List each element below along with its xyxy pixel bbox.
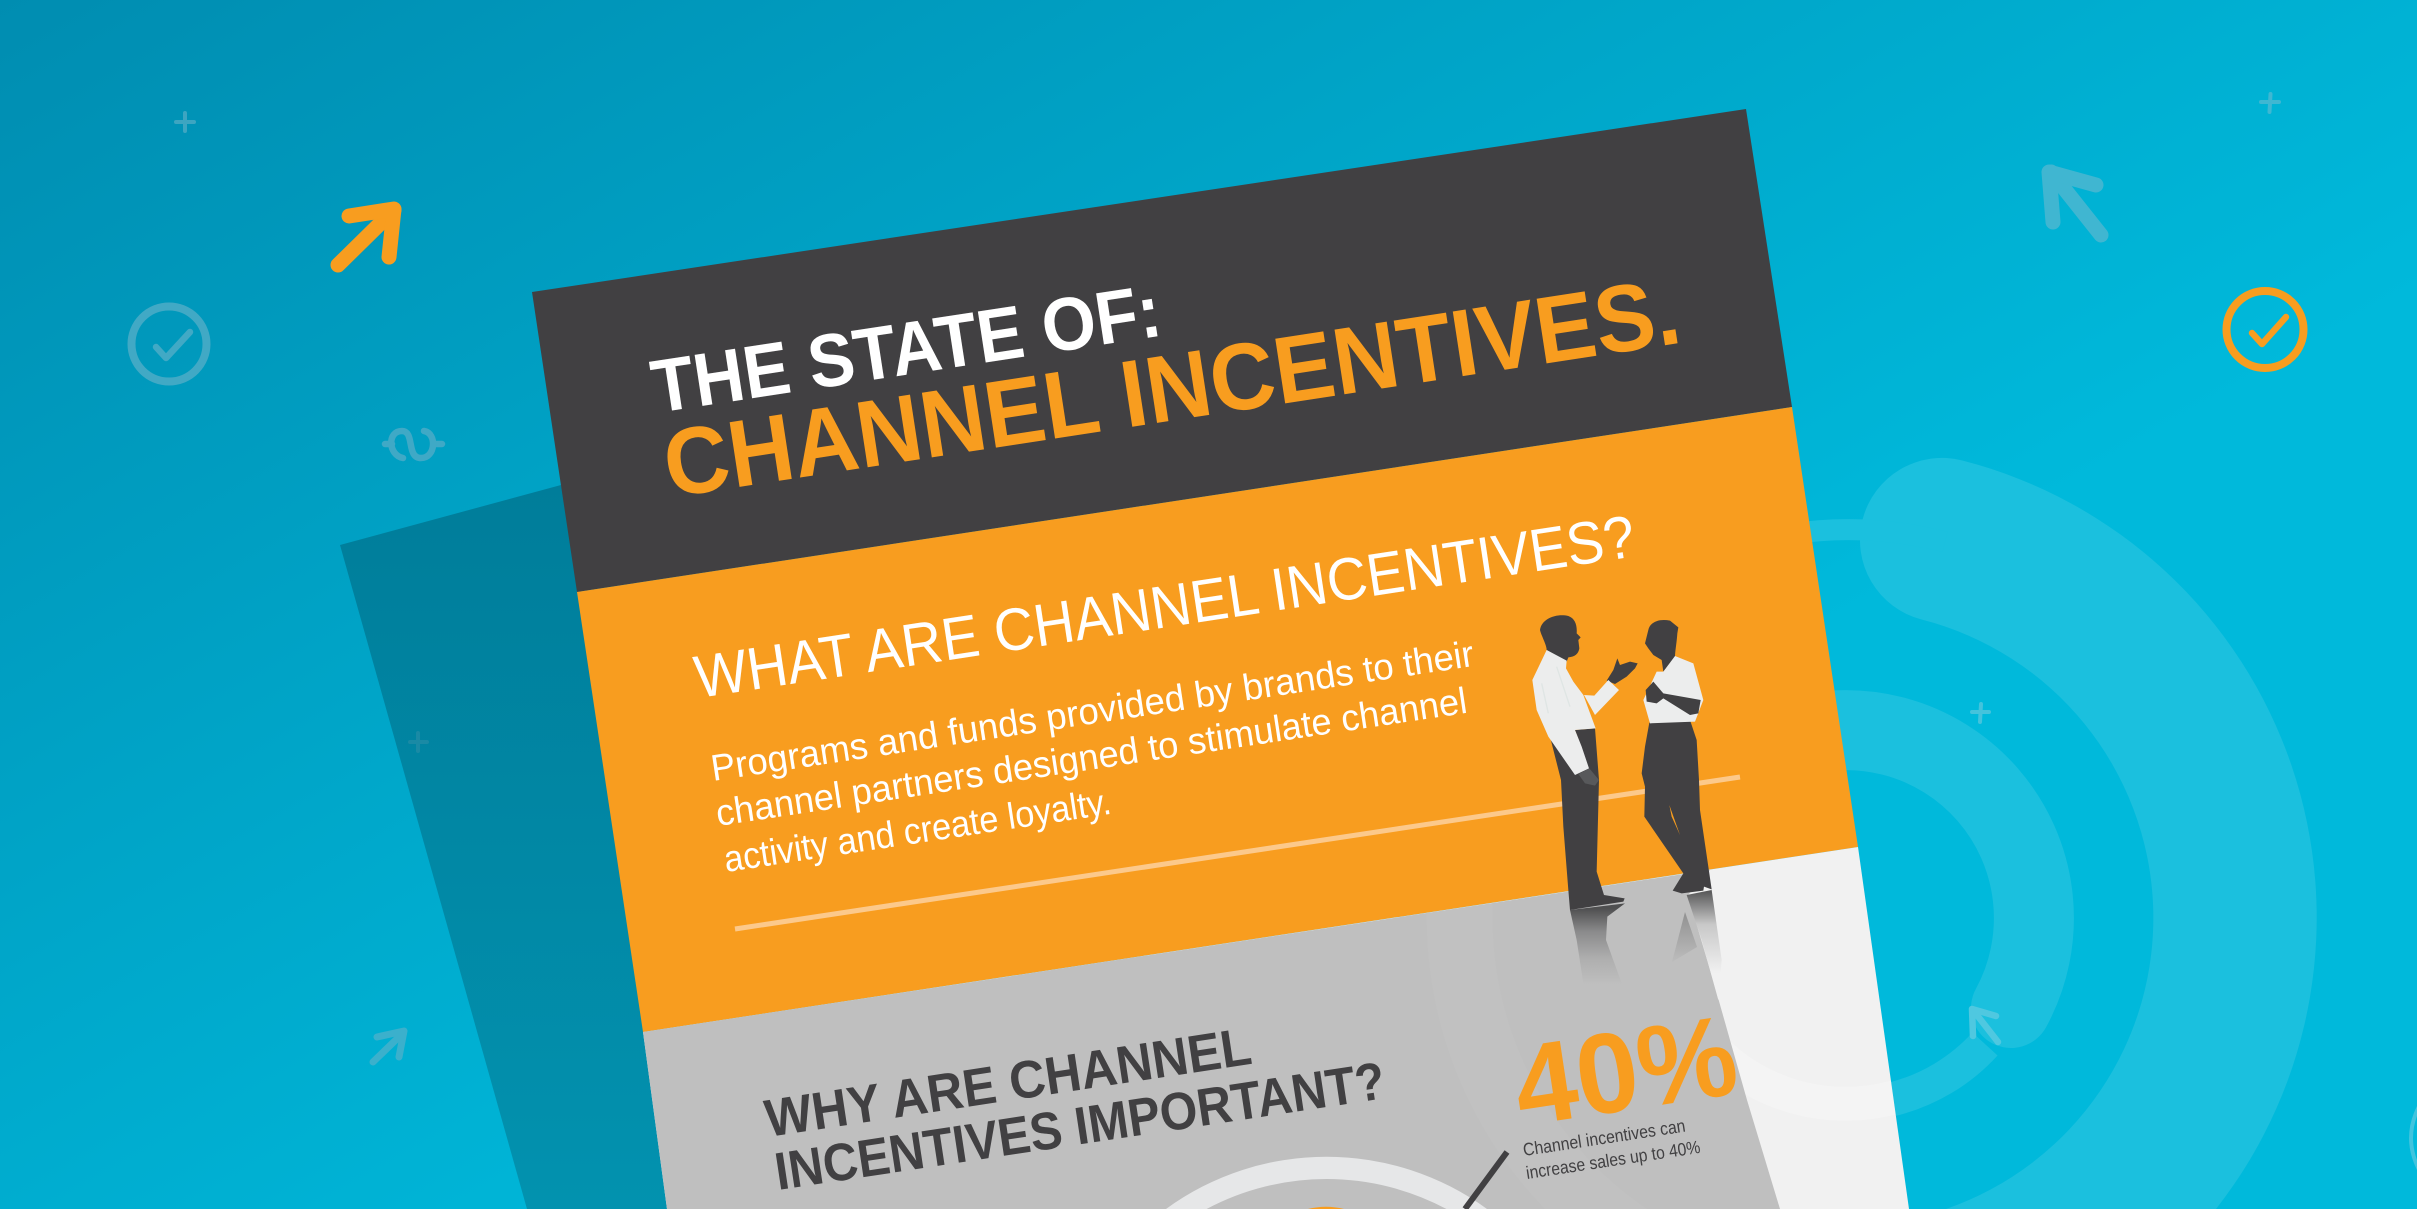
man <box>1532 615 1638 910</box>
faint ring on light section <box>1891 1082 1896 1114</box>
title line 1: THE STATE OF: <box>646 268 1167 429</box>
woman <box>1642 620 1712 893</box>
definition text <box>708 633 1477 880</box>
icon: plus top left <box>176 113 194 131</box>
definition text: activity and create loyalty. <box>721 781 1114 880</box>
gauge chart top <box>1166 1157 1487 1209</box>
panel: title band <box>532 109 1792 592</box>
faint band on gray section <box>1427 900 1647 1209</box>
statistic: 40%: 40% <box>1506 992 1745 1151</box>
illustration: floor reflections <box>1570 890 1722 1000</box>
illustration: two silhouetted people talking <box>1532 615 1712 910</box>
definition text: channel partners designed to stimulate channel <box>713 680 1470 834</box>
panel: gray lower section <box>643 870 1780 1209</box>
heading: why are channel incentives important: WHY ARE CHANNEL <box>761 1017 1255 1149</box>
statistic caption: increase sales up to 40% <box>1525 1137 1702 1183</box>
icon: arrow on ring <box>1972 1009 1998 1042</box>
heading: what are channel incentives: WHAT ARE CHANNEL INCENTIVES? <box>690 503 1639 711</box>
divider line <box>735 777 1740 929</box>
icon: partial ring at right edge <box>2409 1106 2417 1170</box>
icon: faded arrow top right <box>2049 172 2101 235</box>
statistic caption <box>1522 1116 1702 1183</box>
definition text: Programs and funds provided by brands to their <box>708 633 1477 789</box>
panel: light lower section <box>643 847 1909 1209</box>
infographic page <box>532 109 1909 1209</box>
icon: small arrow lower left <box>373 1031 404 1062</box>
icon: orange check circle <box>2226 291 2304 368</box>
icon: plus on back sheet <box>410 733 427 751</box>
icon: plus top right <box>2261 94 2279 112</box>
back sheet <box>340 485 700 1209</box>
heading: why are channel incentives important: INCENTIVES IMPORTANT? <box>771 1051 1389 1202</box>
icon: squiggle <box>385 431 442 458</box>
callout line <box>1465 1152 1507 1209</box>
title line 2: CHANNEL INCENTIVES. <box>657 258 1687 518</box>
panel: definition band <box>577 407 1858 1032</box>
icon: plus middle right <box>1972 704 1989 722</box>
decorative large rings <box>1780 458 2317 1209</box>
icon: orange arrow <box>338 209 394 265</box>
statistic caption: Channel incentives can <box>1522 1116 1687 1160</box>
icon: faded check circle left <box>132 306 206 382</box>
